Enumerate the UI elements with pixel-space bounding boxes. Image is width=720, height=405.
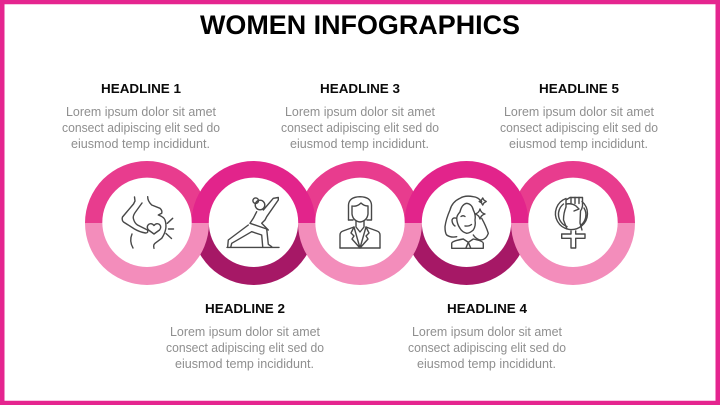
text block: headline 1: Lorem ipsum dolor sit amet [66,105,217,119]
text block: headline 5 [500,81,658,151]
icon: pregnant belly with heart [122,197,174,248]
text block: headline 4: eiusmod temp incididunt. [417,357,556,371]
icon: female symbol with raised fist [555,198,587,248]
text block: headline 4: consect adipiscing elit sed do [408,341,566,355]
text block: headline 5: consect adipiscing elit sed do [500,121,658,135]
icon: yoga warrior pose [227,198,279,247]
text block: headline 4: HEADLINE 4 [447,301,528,316]
text block: headline 4 [408,301,566,371]
text block: headline 2: consect adipiscing elit sed do [166,341,324,355]
text block: headline 2 [166,301,324,371]
text block: headline 1 [62,81,220,151]
text block: headline 5: Lorem ipsum dolor sit amet [504,105,655,119]
text block: headline 2: Lorem ipsum dolor sit amet [170,325,321,339]
text block: headline 5: eiusmod temp incididunt. [509,137,648,151]
text block: headline 3 [281,81,439,151]
text block: headline 5: HEADLINE 5 [539,81,619,96]
text block: headline 3: HEADLINE 3 [320,81,400,96]
text block: headline 3: consect adipiscing elit sed do [281,121,439,135]
text block: headline 3: Lorem ipsum dolor sit amet [285,105,436,119]
text block: headline 2: eiusmod temp incididunt. [175,357,314,371]
text block: headline 1: consect adipiscing elit sed do [62,121,220,135]
title: WOMEN INFOGRAPHICS [200,10,520,40]
chain of interlocked rings [85,161,635,285]
text block: headline 1: HEADLINE 1 [101,81,181,96]
text block: headline 4: Lorem ipsum dolor sit amet [412,325,563,339]
icon: woman with sparkle [445,196,488,248]
icon: woman portrait [340,197,380,248]
text block: headline 1: eiusmod temp incididunt. [71,137,210,151]
text block: headline 2: HEADLINE 2 [205,301,285,316]
text block: headline 3: eiusmod temp incididunt. [290,137,429,151]
